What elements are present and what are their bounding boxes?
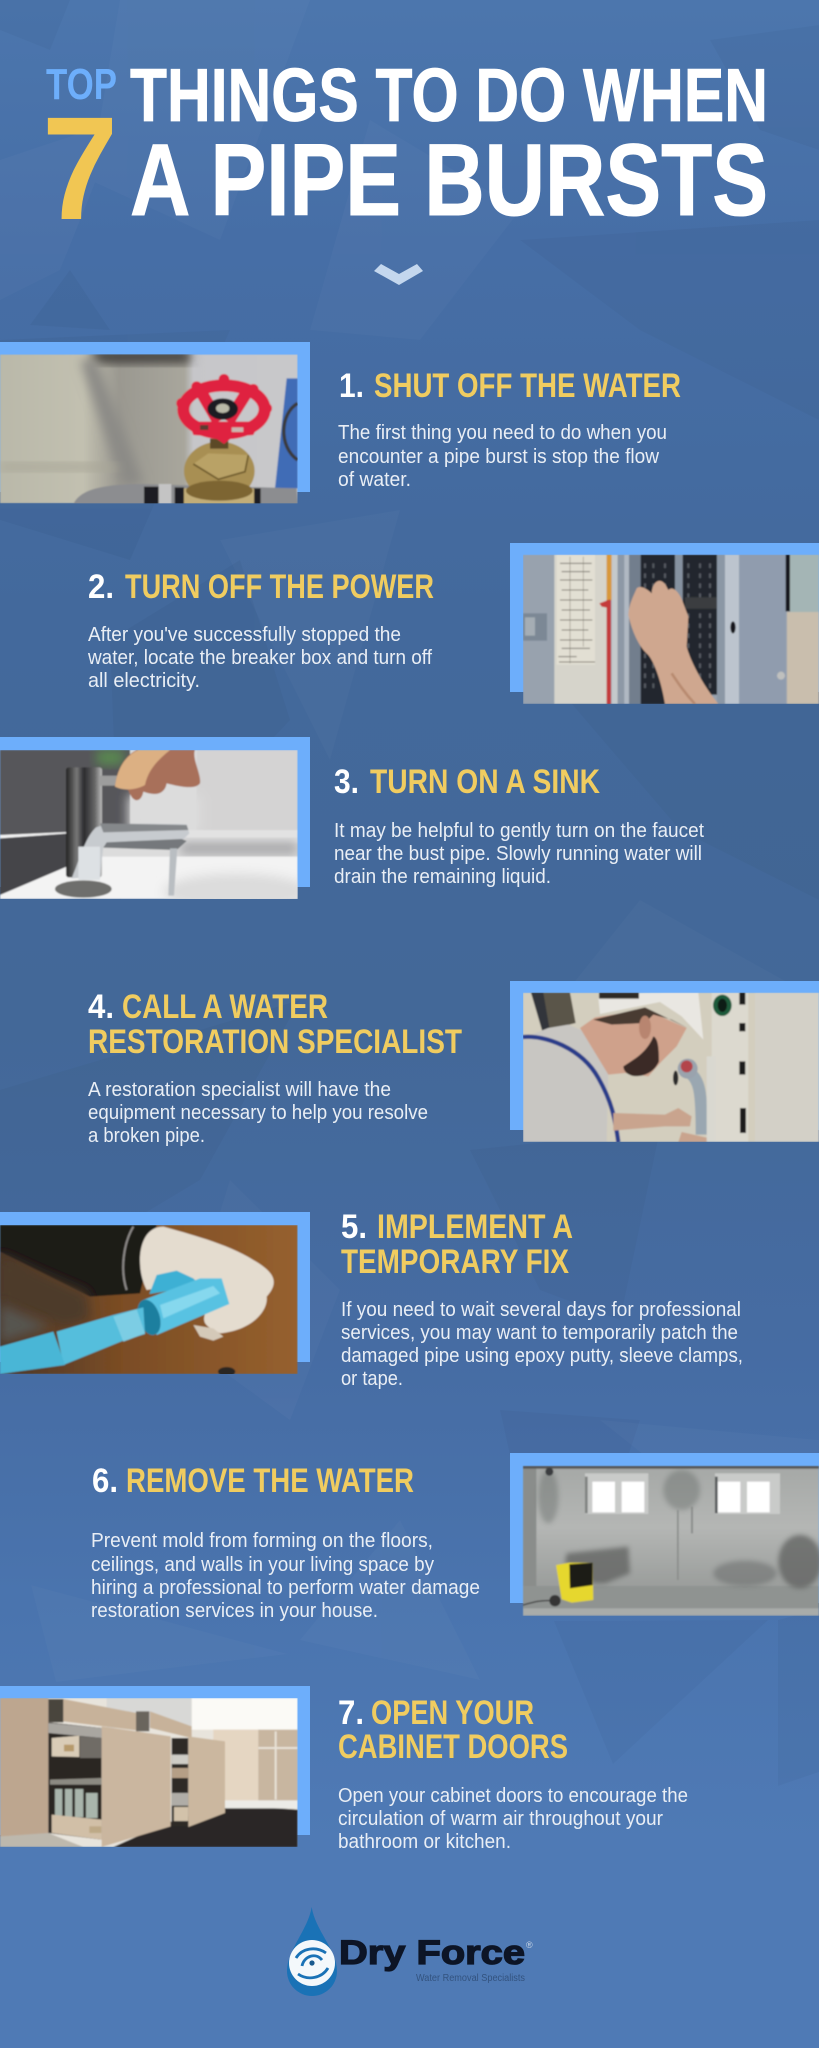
step 4 text: CALL A WATER bbox=[122, 988, 328, 1026]
body: ceilings, and walls in your living space by bbox=[91, 1554, 434, 1576]
heading: 6. bbox=[92, 1462, 118, 1500]
body bbox=[341, 1299, 743, 1390]
body bbox=[338, 1785, 688, 1853]
body: a broken pipe. bbox=[88, 1125, 205, 1147]
heading: 4. bbox=[88, 988, 114, 1026]
panel: step 4 photo, plumber bbox=[510, 981, 819, 1142]
logo: Dry Force bbox=[287, 1907, 533, 1996]
heading: 7. bbox=[338, 1694, 364, 1732]
body bbox=[334, 820, 704, 888]
panel: step 1 photo, valve bbox=[0, 342, 310, 504]
body bbox=[91, 1530, 480, 1622]
heading: 1. bbox=[339, 367, 364, 405]
step 6 text: REMOVE THE WATER bbox=[126, 1462, 414, 1500]
body: The first thing you need to do when you bbox=[338, 422, 667, 444]
step 7 text: OPEN YOUR bbox=[371, 1694, 534, 1732]
body: It may be helpful to gently turn on the faucet bbox=[334, 820, 704, 842]
body: circulation of warm air throughout your bbox=[338, 1808, 663, 1830]
step 3 text bbox=[334, 763, 704, 888]
step 5 text: TEMPORARY FIX bbox=[341, 1243, 569, 1281]
icon: water drop with swirl bbox=[287, 1907, 337, 1996]
body: Open your cabinet doors to encourage the bbox=[338, 1785, 688, 1807]
body: restoration services in your house. bbox=[91, 1600, 378, 1622]
label: big number 7: 7 bbox=[42, 87, 118, 251]
panel: step 7 photo, cabinets bbox=[0, 1686, 310, 1847]
body: Prevent mold from forming on the floors, bbox=[91, 1530, 433, 1552]
body: all electricity. bbox=[88, 670, 200, 692]
panel: step 6 photo, basement bbox=[510, 1453, 819, 1616]
body: near the bust pipe. Slowly running water will bbox=[334, 843, 702, 865]
panel: step 5 photo, pipe patch bbox=[0, 1212, 310, 1376]
wordmark: Dry Force bbox=[339, 1934, 525, 1972]
step 2 text: TURN OFF THE POWER bbox=[125, 568, 434, 606]
body: If you need to wait several days for professional bbox=[341, 1299, 741, 1321]
step 5 text bbox=[341, 1208, 743, 1390]
body: of water. bbox=[338, 469, 411, 491]
body: services, you may want to temporarily patch the bbox=[341, 1322, 738, 1344]
registered mark: ® bbox=[526, 1940, 533, 1950]
step 6 text bbox=[91, 1462, 480, 1622]
step 1 text bbox=[338, 367, 681, 491]
step 1 text: SHUT OFF THE WATER bbox=[374, 367, 681, 405]
body bbox=[88, 1079, 428, 1147]
body: equipment necessary to help you resolve bbox=[88, 1102, 428, 1124]
panel: step 2 photo, breaker box bbox=[510, 543, 819, 704]
body: bathroom or kitchen. bbox=[338, 1831, 511, 1853]
step 7 text: CABINET DOORS bbox=[338, 1728, 568, 1766]
body: damaged pipe using epoxy putty, sleeve clamps, bbox=[341, 1345, 743, 1367]
body: water, locate the breaker box and turn off bbox=[87, 647, 432, 669]
heading: 3. bbox=[334, 763, 359, 801]
step 4 text: RESTORATION SPECIALIST bbox=[88, 1023, 462, 1061]
icon: chevron down bbox=[374, 264, 423, 285]
body: encounter a pipe burst is stop the flow bbox=[338, 446, 660, 468]
body: A restoration specialist will have the bbox=[88, 1079, 391, 1101]
heading: 2. bbox=[88, 568, 114, 606]
title bbox=[42, 53, 768, 251]
step 3 text: TURN ON A SINK bbox=[370, 763, 600, 801]
heading: 5. bbox=[341, 1208, 367, 1246]
body bbox=[87, 624, 432, 692]
body: or tape. bbox=[341, 1368, 403, 1390]
body: hiring a professional to perform water damage bbox=[91, 1577, 480, 1599]
tagline: Water Removal Specialists bbox=[416, 1973, 525, 1984]
step 7 text bbox=[338, 1694, 688, 1853]
panel: step 3 photo, faucet bbox=[0, 737, 310, 910]
body: After you've successfully stopped the bbox=[88, 624, 401, 646]
body: drain the remaining liquid. bbox=[334, 866, 551, 888]
step 5 text: IMPLEMENT A bbox=[377, 1208, 573, 1246]
step 2 text bbox=[87, 568, 434, 692]
body bbox=[338, 422, 667, 491]
label: TOP: TOP bbox=[46, 60, 117, 109]
step 4 text bbox=[88, 988, 462, 1147]
